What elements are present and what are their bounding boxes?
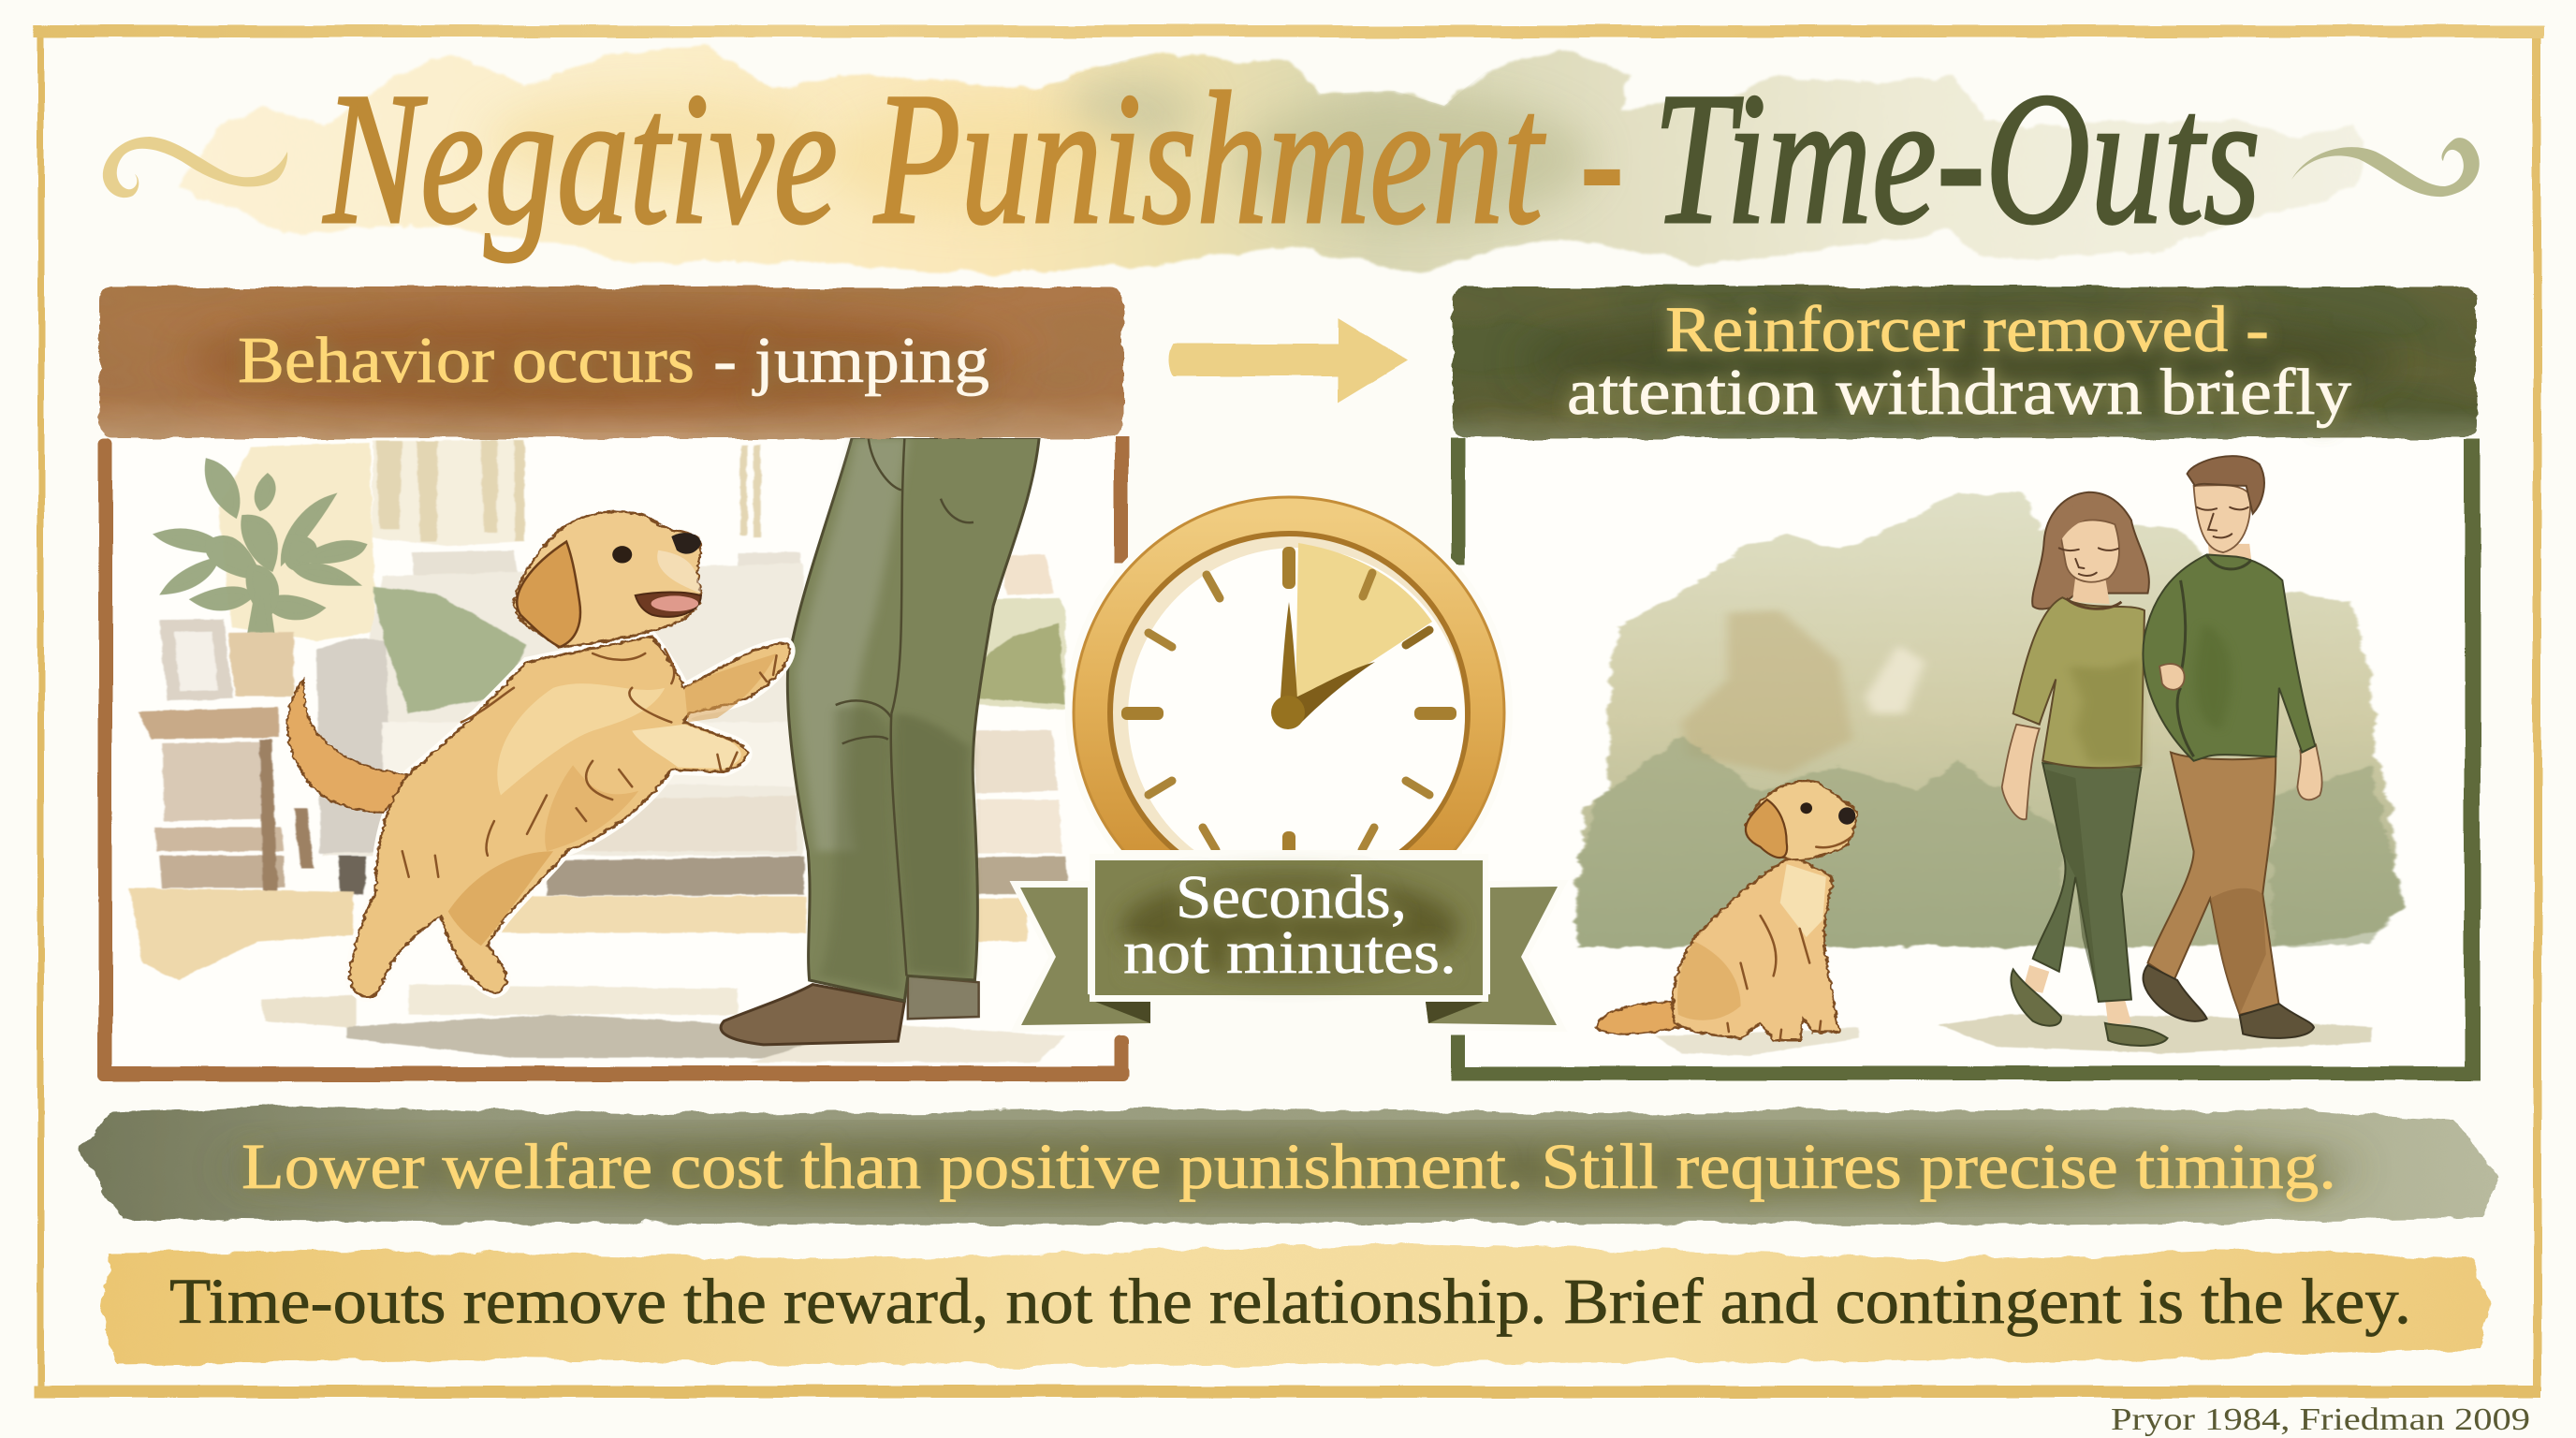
- panel: behavior occurs: [98, 286, 1129, 1081]
- man walking: [2143, 456, 2322, 1038]
- header: behavior occurs: [99, 286, 1123, 438]
- banner: lower welfare cost: Lower welfare cost than positive punishment. Still requires precise timing.: [242, 1131, 2336, 1202]
- rug and floor: [130, 888, 1065, 1062]
- arrow: [1170, 318, 1407, 403]
- title: [322, 53, 2261, 263]
- ribbon text: Seconds,: [1176, 863, 1407, 932]
- panel interior: [1462, 436, 2466, 1066]
- side table with frame and pot: [139, 619, 314, 892]
- title: Punishment: [873, 53, 1546, 263]
- jumping golden retriever puppy: [287, 511, 790, 997]
- clock ring: [1091, 515, 1486, 910]
- sitting golden retriever: [1596, 781, 1857, 1040]
- standing person's legs: [721, 437, 1039, 1045]
- header: reinforcer removed: [1453, 286, 2477, 438]
- elapsed-time wedge: [1295, 543, 1432, 712]
- wall and curtains: [218, 441, 761, 640]
- citation: Pryor 1984, Friedman 2009: [2111, 1402, 2530, 1437]
- ribbon text: not minutes.: [1123, 918, 1456, 987]
- scene: living room with jumping puppy and standing legs: [130, 437, 1069, 1062]
- title: -: [1579, 53, 1625, 263]
- ground shadows: [1655, 1015, 2371, 1055]
- flourish: left: [103, 137, 287, 198]
- panel interior: [110, 436, 1114, 1068]
- clock hub: [1271, 696, 1305, 729]
- ribbon tails: [1020, 888, 1150, 1025]
- sofa: [317, 550, 804, 896]
- flourish: right: [2291, 138, 2480, 197]
- scene: couple walking away while the puppy sits: [1576, 456, 2404, 1055]
- title: Negative: [322, 53, 838, 263]
- clock face halo: [1065, 489, 1513, 936]
- title wash tints: [487, 75, 1591, 225]
- header: reinforcer removed: attention withdrawn briefly: [1567, 357, 2351, 429]
- woman walking: [2002, 492, 2168, 1046]
- title watercolor wash: [177, 44, 2364, 274]
- ribbon text: [1123, 863, 1456, 987]
- title: Time-Outs: [1653, 53, 2261, 263]
- hour ticks: [1121, 547, 1456, 859]
- clock hands: [1280, 602, 1298, 713]
- panel border: [98, 436, 1129, 1081]
- ribbon body: [1090, 854, 1488, 1002]
- banner: takeaway message: Time-outs remove the reward, not the relationship. Brief and contingent is the key.: [169, 1266, 2411, 1337]
- background trees wash: [1576, 492, 2404, 946]
- banner: lower welfare cost: [80, 1107, 2500, 1225]
- header: reinforcer removed: Reinforcer removed -: [1665, 294, 2269, 366]
- header: behavior occurs: - jumping: [713, 325, 989, 397]
- plant: [159, 462, 363, 630]
- ribbon banner: [1020, 854, 1558, 1025]
- furniture behind the legs: [973, 554, 1069, 943]
- header: behavior occurs: Behavior occurs: [238, 325, 695, 397]
- banner: takeaway message: [101, 1243, 2488, 1367]
- panel border: [1451, 438, 2481, 1080]
- clock: [1065, 489, 1513, 936]
- panel: reinforcer removed: [1451, 286, 2481, 1080]
